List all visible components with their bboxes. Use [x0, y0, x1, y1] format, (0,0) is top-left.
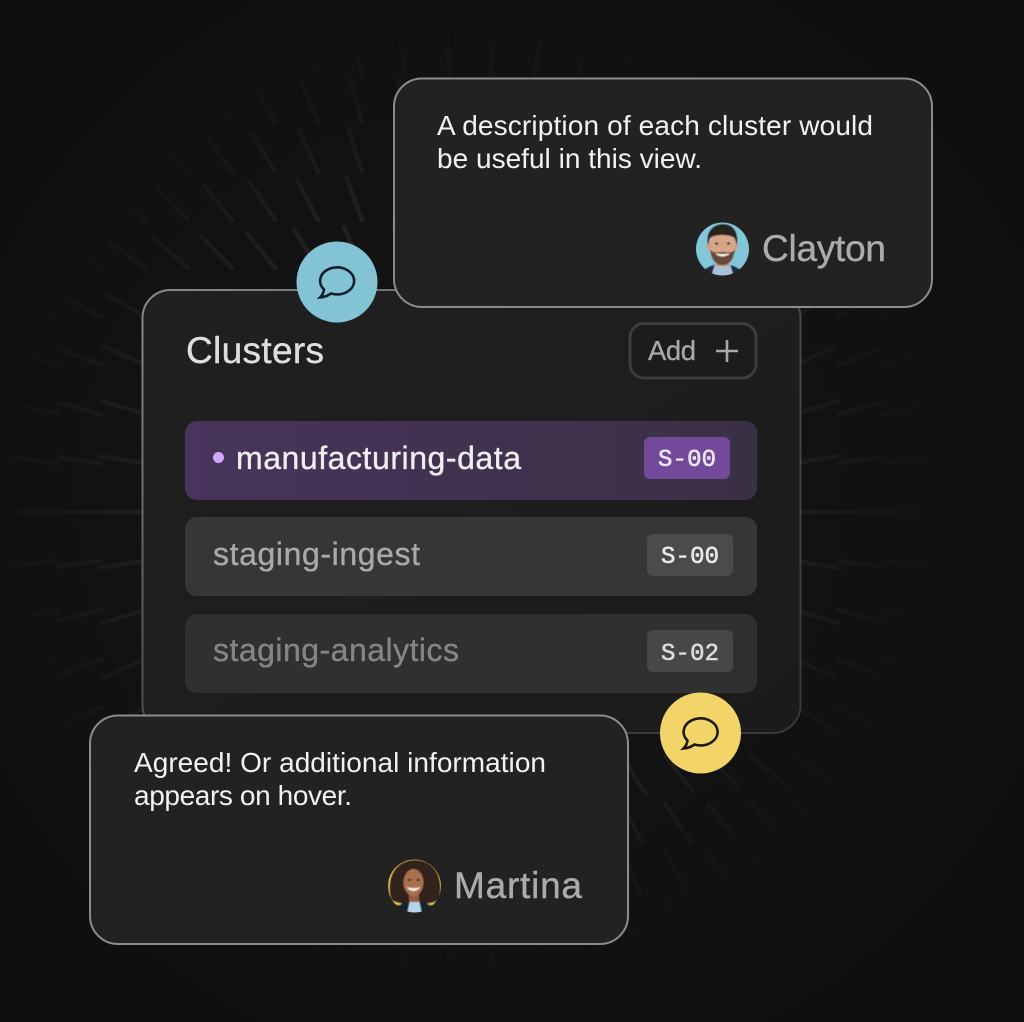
row: staging-ingest: [185, 517, 757, 596]
avatar: Clayton: [695, 222, 750, 277]
comment text: Agreed! Or additional information: [134, 747, 546, 778]
comment text: appears on hover.: [134, 780, 352, 811]
name: Clayton: Clayton: [762, 228, 886, 269]
icon: yellow comment badge: [660, 692, 741, 774]
avatar: Martina: [388, 860, 441, 912]
name: Martina: Martina: [454, 865, 582, 906]
heading: clusters: Clusters: [186, 330, 324, 371]
comment text: be useful in this view.: [437, 143, 702, 174]
comment card: Martina: [90, 716, 628, 944]
row: staging-ingest: staging-ingest: [213, 536, 420, 572]
row: staging-analytics: S-02: [661, 641, 719, 668]
panel: clusters: [142, 290, 800, 733]
button: add: Add: [648, 335, 696, 366]
row: manufacturing-data: S-00: [658, 447, 716, 474]
button: add: [630, 324, 756, 378]
row: staging-analytics: [185, 614, 757, 693]
row: manufacturing-data: [185, 421, 757, 500]
comment card: Clayton: [394, 78, 932, 307]
comment text: A description of each cluster would: [437, 110, 873, 141]
icon: blue comment badge: [296, 242, 378, 322]
row: staging-ingest: S-00: [661, 544, 719, 571]
row: staging-analytics: staging-analytics: [213, 632, 459, 668]
row: manufacturing-data: manufacturing-data: [236, 440, 521, 476]
